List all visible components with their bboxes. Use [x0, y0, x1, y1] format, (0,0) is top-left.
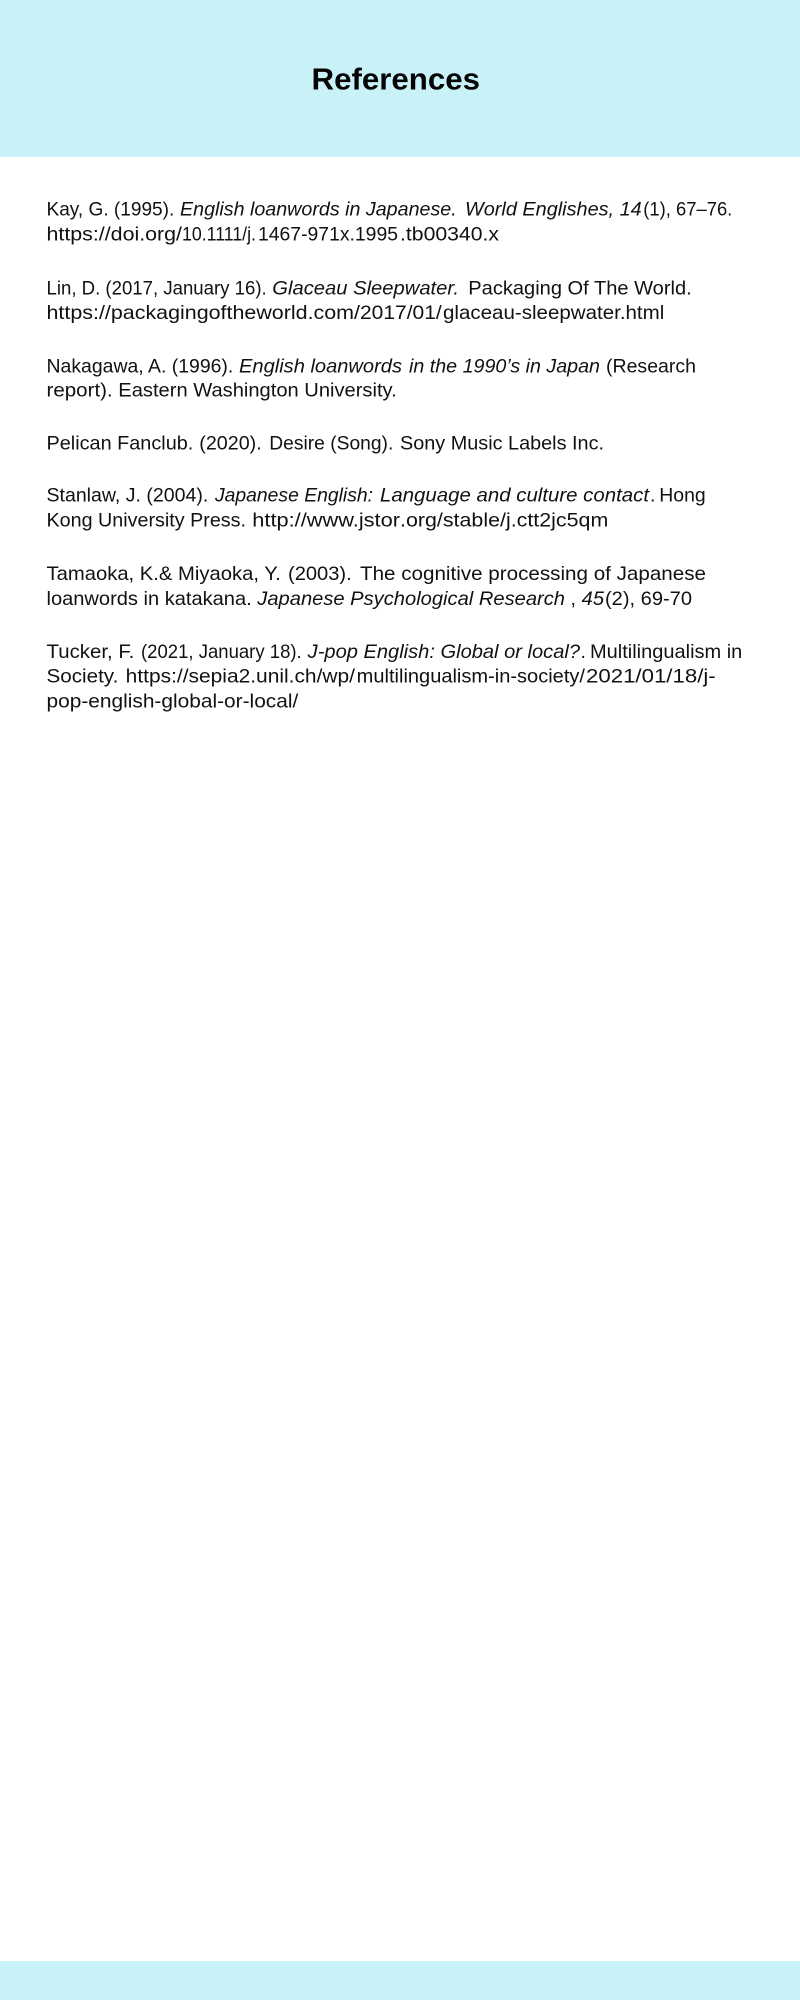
- reference: Pelican Fanclub 2020: Desire (Song).: [269, 432, 393, 454]
- reference: Tucker 2021: 2021/01/18/j-: [586, 666, 716, 688]
- reference: Lin 2017: [46, 277, 692, 324]
- title: References: [312, 61, 480, 96]
- reference: Lin 2017: glaceau-sleepwater.html: [443, 302, 664, 324]
- reference: Kay 1995: .tb00340.x: [400, 224, 499, 246]
- reference: Nakagawa 1996: [46, 355, 696, 402]
- reference: Tucker 2021: (2021, January 18).: [141, 641, 302, 663]
- reference: Lin 2017: https://packagingoftheworld.com/: [46, 302, 361, 324]
- reference: Tamaoka and Miyaoka 2003: loanwords in katakana.: [46, 588, 252, 610]
- reference: Stanlaw 2004: .org/stable/j.ctt2jc5qm: [400, 510, 608, 532]
- reference: Kay 1995: Kay, G. (1995).: [46, 199, 174, 221]
- reference: Stanlaw 2004: Language and culture contact: [380, 485, 651, 507]
- reference: Stanlaw 2004: Stanlaw, J. (2004).: [46, 485, 208, 507]
- reference: Lin 2017: Packaging Of The World.: [468, 277, 692, 299]
- reference: Tucker 2021: pop-english-global-or-local/: [46, 691, 299, 713]
- reference: Kay 1995: 1467-971x.1995: [258, 224, 398, 246]
- reference: Tucker 2021: .: [580, 641, 586, 663]
- reference: Nakagawa 1996: (Research: [606, 355, 696, 377]
- reference: Tamaoka and Miyaoka 2003: [46, 563, 706, 610]
- reference: Stanlaw 2004: [46, 485, 706, 532]
- reference: Tucker 2021: https://sepia2.unil.ch/wp/: [126, 666, 356, 688]
- reference: Tamaoka and Miyaoka 2003: Tamaoka, K.& Miyaoka, Y.: [46, 563, 281, 585]
- reference: Tamaoka and Miyaoka 2003: 45: [582, 588, 604, 610]
- reference: Kay 1995: 10.1111/j.: [182, 224, 256, 246]
- reference: Kay 1995: World Englishes, 14: [465, 199, 642, 221]
- reference: Stanlaw 2004: Hong: [659, 485, 706, 507]
- reference: Stanlaw 2004: Kong University Press.: [46, 510, 246, 532]
- reference: Tucker 2021: Society.: [46, 666, 118, 688]
- reference: Stanlaw 2004: http://www.jstor: [252, 510, 401, 532]
- reference: Tamaoka and Miyaoka 2003: (2003).: [288, 563, 352, 585]
- reference: Kay 1995: English loanwords in Japanese.: [180, 199, 457, 221]
- footer band: [0, 1961, 800, 2000]
- reference: Pelican Fanclub 2020: Pelican Fanclub.: [46, 432, 193, 454]
- reference: Tucker 2021: J-pop English: Global or local?: [307, 641, 580, 663]
- reference: Tamaoka and Miyaoka 2003: The cognitive processing of Japanese: [360, 563, 706, 585]
- reference: Kay 1995: (1), 67–76.: [643, 199, 732, 221]
- reference: Nakagawa 1996: Nakagawa, A. (1996).: [46, 355, 233, 377]
- reference: Nakagawa 1996: in the 1990’s in Japan: [409, 355, 600, 377]
- reference: Lin 2017: Lin, D. (2017, January 16).: [46, 277, 267, 299]
- reference: Tucker 2021: Multilingualism in: [590, 641, 742, 663]
- reference: Kay 1995: https://doi.org/: [46, 224, 183, 246]
- reference: Tucker 2021: Tucker, F.: [46, 641, 134, 663]
- reference: Lin 2017: Glaceau Sleepwater.: [272, 277, 459, 299]
- reference: Nakagawa 1996: report).: [46, 380, 113, 402]
- reference: Tucker 2021: multilingualism-in-society/: [357, 666, 586, 688]
- reference: Tucker 2021: [46, 641, 742, 713]
- reference: Tamaoka and Miyaoka 2003: Japanese Psychological Research: [256, 588, 565, 610]
- reference: Nakagawa 1996: English loanwords: [239, 355, 402, 377]
- reference: Pelican Fanclub 2020: (2020).: [199, 432, 262, 454]
- reference: Kay 1995: [46, 199, 732, 246]
- reference: Tamaoka and Miyaoka 2003: (2), 69-70: [605, 588, 692, 610]
- reference: Tamaoka and Miyaoka 2003: ,: [570, 588, 576, 610]
- reference: Lin 2017: 2017/01/: [360, 302, 442, 324]
- header band: [0, 0, 800, 157]
- reference: Stanlaw 2004: Japanese English:: [214, 485, 373, 507]
- reference: Pelican Fanclub 2020: Sony Music Labels Inc.: [400, 432, 604, 454]
- reference: Pelican Fanclub 2020: [46, 432, 604, 454]
- reference: Nakagawa 1996: Eastern Washington University.: [118, 380, 397, 402]
- reference: Stanlaw 2004: .: [650, 485, 655, 507]
